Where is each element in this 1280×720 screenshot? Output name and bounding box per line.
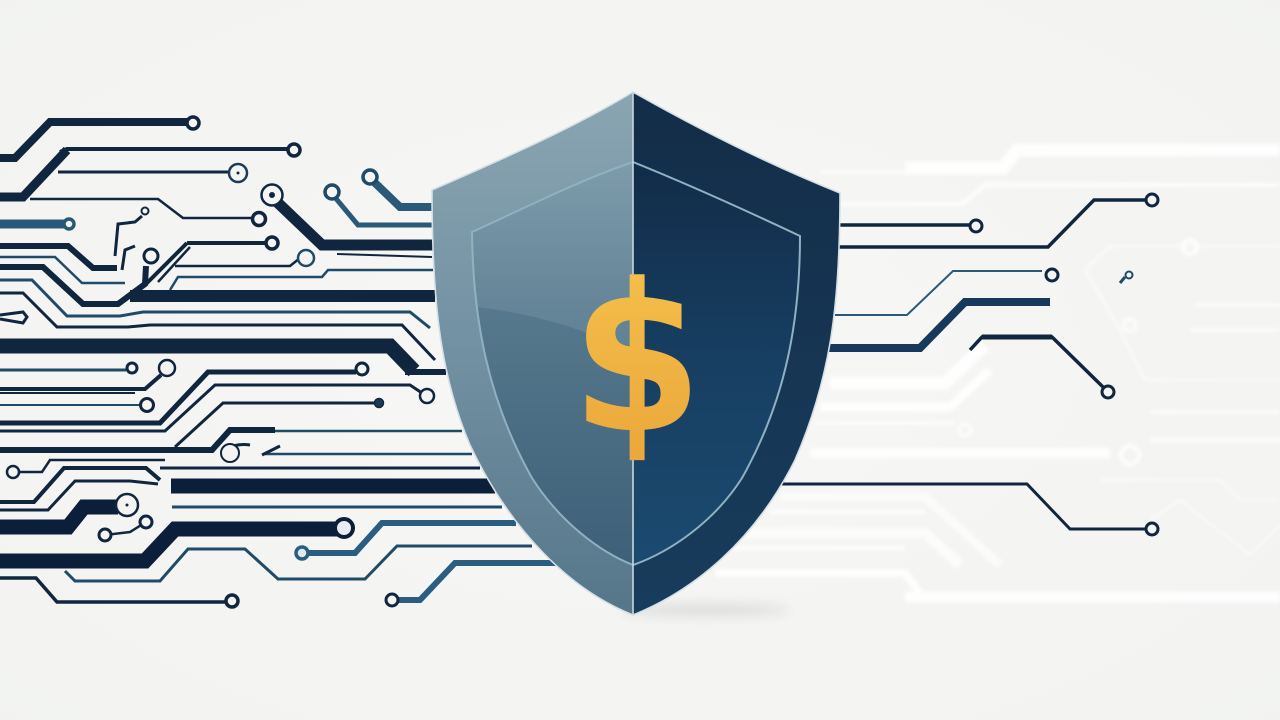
lower left traces [0, 370, 562, 602]
right circuit traces [782, 194, 1158, 535]
shield outer outline [432, 92, 840, 615]
shield inner left panel [472, 162, 633, 565]
shield [432, 92, 840, 615]
upper left nodes [64, 117, 377, 266]
lower left nodes [7, 360, 434, 607]
shield center seam [632, 92, 634, 615]
shield left outer half [432, 92, 633, 615]
shield right outer half [633, 92, 840, 615]
shield shadow [620, 605, 790, 615]
faint white circuit pattern on right [715, 150, 1280, 600]
left circuit traces [0, 117, 562, 607]
shield inner right panel [633, 162, 800, 565]
inner panel highlight [472, 162, 633, 355]
shield inner outline [472, 162, 800, 565]
upper left traces [0, 122, 446, 372]
dollar sign: $ [571, 241, 703, 479]
